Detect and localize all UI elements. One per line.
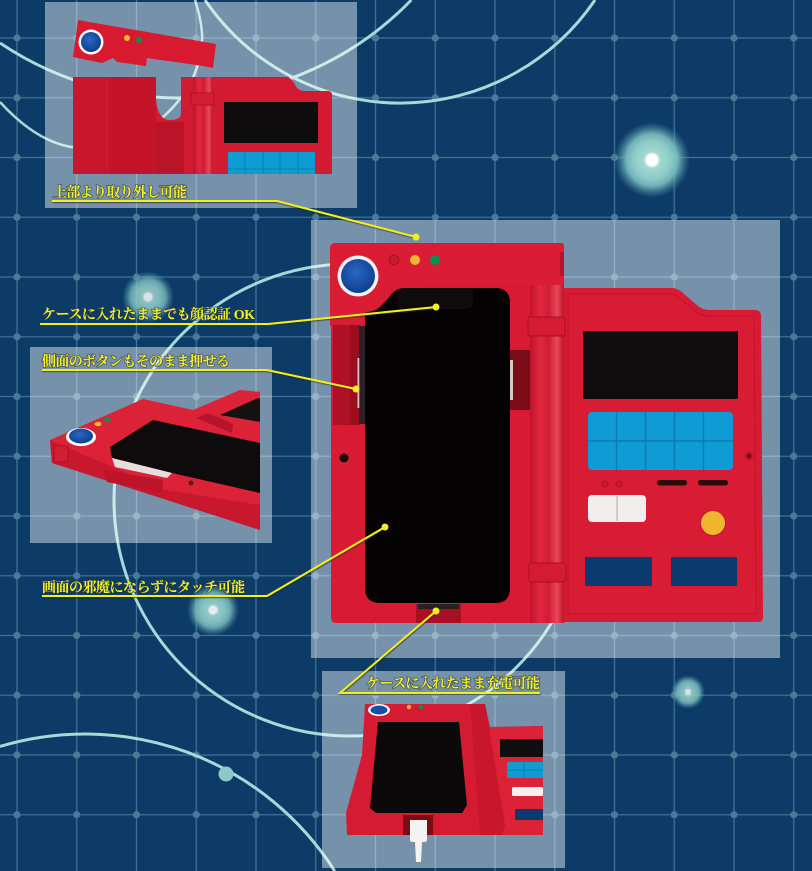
white buttons — [588, 495, 646, 522]
blue ball — [338, 256, 378, 296]
blue keypad — [588, 412, 733, 470]
callout: touch: 画面の邪魔にならずにタッチ可能 — [42, 579, 245, 596]
panel: removable top photo — [45, 2, 357, 208]
panel: main photo — [311, 220, 780, 658]
angled case with cable — [346, 704, 543, 862]
glowing lights — [122, 122, 705, 709]
angled case — [50, 390, 260, 530]
main case: right page — [563, 288, 763, 622]
yellow button — [700, 510, 726, 536]
callout: side buttons: 側面のボタンもそのまま押せる — [42, 353, 230, 370]
panel: charging photo — [322, 671, 565, 868]
phone — [358, 288, 513, 603]
callout: touch — [42, 524, 388, 596]
screw hole — [340, 454, 348, 462]
panel: side button photo — [30, 347, 272, 543]
navy panels — [585, 557, 737, 586]
callout: side buttons — [42, 353, 360, 392]
open case body — [73, 77, 332, 174]
removed lid — [73, 20, 216, 68]
orbit node — [218, 766, 234, 782]
bottom notch — [416, 604, 461, 623]
callout: removable top: 上部より取り外し可能 — [53, 184, 187, 201]
top bar edge — [330, 243, 564, 323]
callout: charging: ケースに入れたまま充電可能 — [366, 675, 540, 692]
hinge — [528, 285, 566, 623]
decorative orbit arcs — [0, 0, 595, 871]
callout: charging — [340, 608, 540, 693]
callout: face recognition — [40, 304, 440, 324]
left recess — [333, 325, 360, 425]
right recess — [505, 350, 537, 410]
small indicator dots and slots — [602, 452, 753, 487]
callout: face recognition: ケースに入れたままでも顔認証 OK — [42, 306, 255, 323]
status lights — [389, 255, 440, 265]
callout: removable top — [52, 184, 420, 240]
display screen — [583, 331, 738, 399]
main case: phone holder — [330, 243, 566, 623]
